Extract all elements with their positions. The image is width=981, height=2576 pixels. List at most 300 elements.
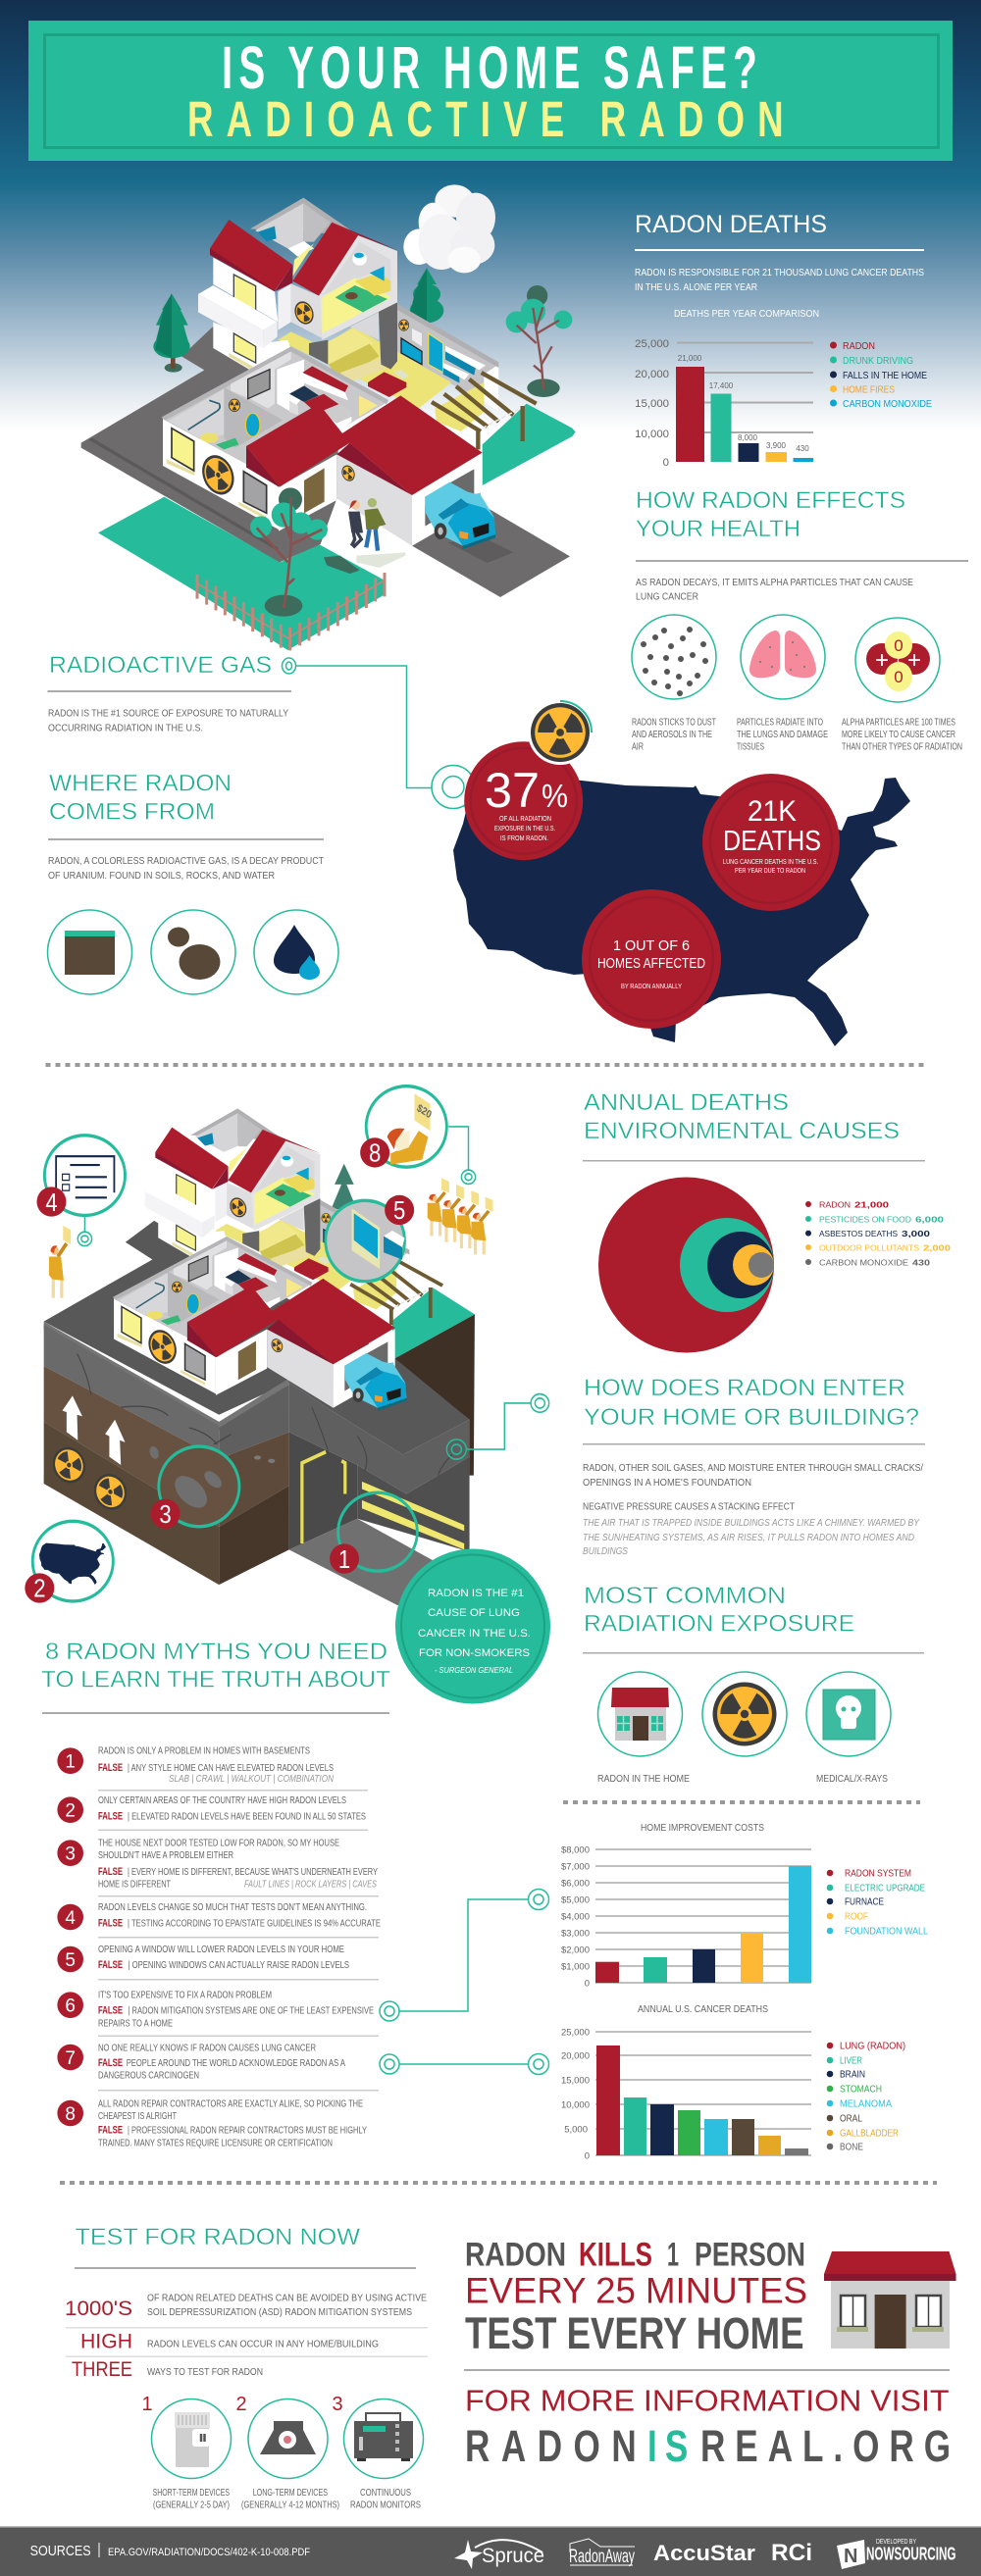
text: radioactive gas body: OCCURRING RADIATION IN THE U.S.	[48, 723, 203, 733]
text: entry explanation: BUILDINGS	[583, 1546, 628, 1557]
myth 6: REPAIRS TO A HOME	[98, 2018, 173, 2029]
quote circle: surgeon general: RADON IS THE #1	[428, 1588, 524, 1599]
trees and cloud	[153, 184, 572, 397]
logo: nowsourcing: N	[844, 2546, 857, 2567]
logo: rci: RCi	[771, 2540, 812, 2566]
heading: RADIOACTIVE GAS	[49, 652, 272, 679]
bar chart: home improvement costs	[561, 1823, 811, 1989]
fact: high: RADON LEVELS CAN OCCUR IN ANY HOME/BUILDING	[147, 2340, 379, 2350]
legend: deaths per year: FALLS IN THE HOME	[843, 371, 927, 381]
myth 2	[57, 1795, 366, 1823]
callout 4: checklist	[36, 1136, 125, 1298]
fence	[197, 573, 385, 650]
legend: 430	[912, 1257, 930, 1267]
myth 7: DANGEROUS CARCINOGEN	[98, 2071, 199, 2082]
bar chart: deaths per year comparison: 10,000	[635, 429, 669, 440]
legend: cancer deaths: GALLBLADDER	[840, 2128, 899, 2140]
title line 2: RADIOACTIVE RADON	[187, 92, 784, 147]
bar chart: deaths per year comparison: 430	[796, 444, 809, 453]
device 3: continuous monitor	[332, 2394, 424, 2511]
heading	[584, 1089, 900, 1144]
callout 8: person with sign: $20	[415, 1102, 434, 1122]
ground and gardens	[81, 327, 576, 650]
bar chart: home improvement costs: $8,000	[561, 1845, 590, 1855]
text: where radon body: OF URANIUM. FOUND IN SOILS, ROCKS, AND WATER	[48, 871, 275, 882]
device 3: continuous monitor: RADON MONITORS	[350, 2500, 421, 2511]
bar chart: deaths per year comparison	[635, 309, 819, 469]
myth 4: 4	[65, 1908, 76, 1929]
icon: alpha particles: +	[907, 647, 921, 674]
connector right	[446, 1394, 549, 1459]
icon: radon in the home	[598, 1672, 683, 1756]
stat: 37 percent: IS FROM RADON.	[500, 835, 548, 842]
device 1: short-term: (GENERALLY 2-5 DAY)	[153, 2500, 230, 2511]
quote circle: surgeon general: CAUSE OF LUNG	[428, 1607, 520, 1619]
radiation discs underground	[48, 1440, 131, 1516]
quote circle: surgeon general: FOR NON-SMOKERS	[419, 1647, 530, 1659]
website url: IS	[647, 2421, 688, 2471]
icon: radon particles	[632, 615, 716, 699]
legend: cancer deaths: LIVER	[840, 2055, 862, 2067]
title line 1: IS YOUR HOME SAFE?	[222, 34, 757, 101]
callout 3: rocks: 3	[159, 1500, 172, 1529]
bar chart: annual us cancer deaths: 20,000	[561, 2051, 590, 2061]
myth 8: | PROFESSIONAL RADON REPAIR CONTRACTORS MUST BE HIGHLY	[128, 2126, 367, 2137]
legend: cancer deaths: BRAIN	[840, 2069, 865, 2081]
icon: alpha particles: 0	[894, 636, 904, 655]
callout 1: basement: 1	[338, 1545, 350, 1574]
myth 1: | ANY STYLE HOME CAN HAVE ELEVATED RADON LEVELS	[128, 1763, 334, 1774]
myth 1: FALSE	[98, 1762, 123, 1774]
heading: YOUR HEALTH	[636, 516, 800, 542]
myth 3: THE HOUSE NEXT DOOR TESTED LOW FOR RADON, SO MY HOUSE	[98, 1839, 339, 1849]
myth 2: | ELEVATED RADON LEVELS HAVE BEEN FOUND IN ALL 50 STATES	[128, 1812, 366, 1823]
myth 7: NO ONE REALLY KNOWS IF RADON CAUSES LUNG CANCER	[98, 2043, 316, 2053]
icon: house	[824, 2251, 955, 2349]
callout: radon kills 1 person: EVERY 25 MINUTES	[465, 2271, 807, 2311]
text: radon deaths intro: IN THE U.S. ALONE PER YEAR	[635, 282, 757, 293]
bar chart: deaths per year comparison: 20,000	[635, 369, 669, 380]
back floors	[397, 304, 498, 412]
text: effects intro: AS RADON DECAYS, IT EMITS ALPHA PARTICLES THAT CAN CAUSE	[636, 578, 913, 588]
heading: HOW RADON EFFECTS	[636, 487, 905, 514]
device 1: short-term: SHORT-TERM DEVICES	[153, 2488, 230, 2499]
stat: 1 out of 6 homes: BY RADON ANNUALLY	[621, 984, 682, 990]
nested circle chart	[598, 1177, 774, 1353]
callouts	[25, 1086, 549, 1603]
device 2: long-term: LONG-TERM DEVICES	[253, 2488, 328, 2499]
bar chart: home improvement costs: HOME IMPROVEMENT COSTS	[641, 1823, 764, 1834]
legend: home improvement costs: RADON SYSTEM	[845, 1869, 911, 1879]
patio	[435, 382, 484, 431]
myth 2: 2	[65, 1800, 76, 1822]
fact: three	[72, 2358, 263, 2381]
bar chart: deaths per year comparison: DEATHS PER YEAR COMPARISON	[674, 309, 819, 320]
stat: 1 out of 6 homes: 1 OUT OF 6	[613, 937, 690, 954]
website url	[465, 2421, 951, 2471]
fact: three: THREE	[72, 2358, 132, 2381]
logo: spruce	[454, 2540, 544, 2569]
legend: 6,000	[915, 1214, 944, 1224]
quote circle: surgeon general: CANCER IN THE U.S.	[418, 1628, 531, 1640]
fact: 1000s	[65, 2294, 427, 2320]
myth 6: IT'S TOO EXPENSIVE TO FIX A RADON PROBLEM	[98, 1991, 272, 2001]
callout: radon kills 1 person: KILLS	[579, 2237, 652, 2274]
text: entry explanation: NEGATIVE PRESSURE CAUSES A STACKING EFFECT	[583, 1502, 795, 1512]
callout 8: person with sign: 8	[369, 1139, 381, 1168]
heading	[584, 1583, 854, 1638]
text: entry explanation: OPENINGS IN A HOME'S FOUNDATION	[583, 1478, 751, 1489]
heading: YOUR HOME OR BUILDING?	[584, 1404, 919, 1431]
icon: radiation symbol	[702, 1672, 787, 1756]
callout 1: basement	[330, 1492, 417, 1574]
stat: 37 percent: 37	[485, 763, 540, 818]
fact: 1000s: SOIL DEPRESSURIZATION (ASD) RADON MITIGATION SYSTEMS	[147, 2307, 412, 2318]
stat: 37 percent: EXPOSURE IN THE U.S.	[494, 826, 555, 833]
myth 1	[57, 1746, 335, 1785]
myth 1: 1	[65, 1751, 76, 1773]
stat: 21k deaths	[702, 774, 840, 911]
text: where radon body: RADON, A COLORLESS RADIOACTIVE GAS, IS A DECAY PRODUCT	[48, 856, 324, 867]
text: radon deaths intro: RADON IS RESPONSIBLE FOR 21 THOUSAND LUNG CANCER DEATHS	[635, 268, 924, 278]
myth 5: 5	[65, 1950, 76, 1971]
legend: 2,000	[923, 1243, 951, 1253]
bar chart: home improvement costs: $3,000	[561, 1928, 590, 1940]
map of the united states with statistics	[453, 700, 910, 1046]
myth 6: 6	[65, 1996, 76, 2016]
myth 3: 3	[65, 1844, 76, 1865]
house	[163, 198, 537, 549]
captions: effects: TISSUES	[737, 742, 764, 753]
title banner	[28, 21, 953, 161]
bar chart: home improvement costs: $2,000	[561, 1945, 590, 1955]
logo: nowsourcing	[837, 2539, 955, 2569]
stat: 37 percent: OF ALL RADIATION	[499, 816, 551, 823]
text: entry explanation: THE AIR THAT IS TRAPPED INSIDE BUILDINGS ACTS LIKE A CHIMNEY. WARMED BY	[583, 1518, 920, 1529]
callout: radon kills 1 person: TEST EVERY HOME	[465, 2308, 804, 2358]
legend: deaths per year	[830, 341, 932, 410]
myth 5: FALSE	[98, 1959, 123, 1971]
heading: 8 radon myths: TO LEARN THE TRUTH ABOUT	[41, 1667, 390, 1692]
text: where radon body	[48, 856, 324, 882]
heading: ENVIRONMENTAL CAUSES	[584, 1118, 900, 1144]
fact: three: WAYS TO TEST FOR RADON	[147, 2367, 263, 2378]
text: radioactive gas body: RADON IS THE #1 SOURCE OF EXPOSURE TO NATURALLY	[48, 709, 288, 720]
myth 7: 7	[65, 2048, 76, 2069]
legend: deaths per year: DRUNK DRIVING	[843, 356, 913, 367]
legend: home improvement costs: ROOF	[845, 1912, 868, 1922]
legend: 3,000	[902, 1229, 930, 1238]
four people with signs	[428, 1179, 492, 1254]
callout: radon kills 1 person: PERSON	[695, 2237, 805, 2274]
call to action: for more information: FOR MORE INFORMATION VISIT	[465, 2384, 950, 2418]
front wings	[279, 454, 336, 531]
bar chart: deaths per year comparison: 3,900	[766, 441, 787, 450]
upper storey	[250, 198, 358, 235]
panel: how radon effects your health	[632, 487, 968, 753]
legend: CARBON MONOXIDE	[819, 1257, 908, 1267]
legend: cancer deaths: MELANOMA	[840, 2098, 892, 2110]
panel: most common radiation exposure	[583, 1583, 924, 1785]
bar chart: annual us cancer deaths: ANNUAL U.S. CANCER DEATHS	[638, 2004, 768, 2015]
legend: home improvement costs: FURNACE	[845, 1896, 884, 1908]
bar chart: home improvement costs: $4,000	[561, 1912, 590, 1922]
myth 4	[57, 1902, 381, 1930]
myth 6: FALSE	[98, 2005, 123, 2017]
quote circle: surgeon general: - SURGEON GENERAL	[435, 1666, 513, 1675]
illustration: house on ground cross-section	[25, 1086, 549, 1605]
callout 5: window and books: 5	[393, 1197, 405, 1226]
callout 8: person with sign	[360, 1086, 476, 1184]
captions	[597, 1774, 888, 1785]
legend: ASBESTOS DEATHS	[819, 1229, 898, 1238]
sources: EPA.GOV/RADIATION/DOCS/402-K-10-008.PDF	[108, 2547, 310, 2558]
device 2: long-term: 2	[235, 2394, 247, 2415]
bar chart: home improvement costs: $5,000	[561, 1894, 590, 1906]
myth 8: TRAINED. MANY STATES REQUIRE LICENSURE OR CERTIFICATION	[98, 2139, 333, 2149]
myth 6	[57, 1991, 374, 2029]
stat: 37 percent: %	[542, 778, 568, 814]
callout 2: map of usa: 2	[33, 1575, 46, 1603]
myth 8: ALL RADON REPAIR CONTRACTORS ARE EXACTLY ALIKE, SO PICKING THE	[98, 2098, 363, 2109]
device 2: long-term	[235, 2394, 339, 2511]
panel: annual deaths environmental causes	[583, 1089, 951, 1353]
myth 3: FALSE	[98, 1866, 123, 1878]
myth 2: ONLY CERTAIN AREAS OF THE COUNTRY HAVE HIGH RADON LEVELS	[98, 1795, 346, 1806]
icon: water drops	[254, 910, 338, 994]
legend: deaths per year: CARBON MONOXIDE	[843, 399, 932, 410]
bar chart: home improvement costs: $1,000	[561, 1961, 590, 1973]
text: radon deaths intro	[635, 268, 924, 293]
sky gradient background	[0, 0, 981, 431]
myth 5: OPENING A WINDOW WILL LOWER RADON LEVELS IN YOUR HOME	[98, 1945, 344, 1955]
website url: REAL.ORG	[700, 2421, 951, 2471]
sources	[30, 2543, 310, 2559]
myth 8: FALSE	[98, 2125, 123, 2137]
icon: alpha particles: 0	[894, 668, 904, 686]
stat: 21k deaths: LUNG CANCER DEATHS IN THE U.S.	[723, 859, 818, 866]
footer	[0, 2526, 981, 2576]
stat: 21k deaths: 21K	[748, 795, 797, 828]
bar chart: home improvement costs: $6,000	[561, 1879, 590, 1889]
small us map in callout 2	[39, 1543, 106, 1585]
bar chart: deaths per year comparison: 0	[663, 457, 669, 469]
stat: 1 out of 6 homes: HOMES AFFECTED	[597, 955, 705, 972]
myth 8: CHEAPEST IS ALRIGHT	[98, 2111, 177, 2122]
myth 8: 8	[65, 2104, 76, 2125]
heading: HOW DOES RADON ENTER	[584, 1375, 905, 1401]
device 3: continuous monitor: 3	[332, 2394, 343, 2415]
device 3: continuous monitor: CONTINUOUS	[360, 2488, 411, 2499]
bar chart: annual us cancer deaths: 15,000	[561, 2075, 590, 2087]
heading: radon deaths: RADON DEATHS	[635, 211, 827, 238]
heading	[49, 771, 232, 826]
captions: MEDICAL/X-RAYS	[816, 1774, 888, 1785]
callout 4: checklist: 4	[45, 1188, 58, 1217]
myth 7: PEOPLE AROUND THE WORLD ACKNOWLEDGE RADON AS A	[127, 2058, 345, 2069]
bar chart: annual us cancer deaths: 5,000	[564, 2124, 588, 2136]
legend: cancer deaths	[827, 2042, 905, 2153]
fact: high	[80, 2331, 379, 2353]
heading: MOST COMMON	[584, 1583, 786, 1609]
bar chart: deaths per year comparison: 8,000	[738, 433, 758, 442]
myth 6: | RADON MITIGATION SYSTEMS ARE ONE OF THE LEAST EXPENSIVE	[128, 2006, 374, 2017]
captions: effects: THE LUNGS AND DAMAGE	[737, 730, 828, 740]
myth 3	[57, 1839, 378, 1891]
legend: cancer deaths: ORAL	[840, 2114, 862, 2124]
captions: effects: PARTICLES RADIATE INTO	[737, 717, 823, 728]
panel: how does radon enter	[583, 1375, 925, 1557]
icon: x-ray skull	[806, 1672, 891, 1756]
stat: 1 out of 6 homes	[582, 889, 721, 1029]
bar chart: home improvement costs: 0	[585, 1979, 590, 1989]
panel: myths list	[57, 1746, 381, 2149]
myth 3: SHOULDN'T HAVE A PROBLEM EITHER	[98, 1850, 233, 1861]
bar chart: annual us cancer deaths: 10,000	[561, 2100, 590, 2110]
legend: home improvement costs	[827, 1869, 928, 1938]
legend: cancer deaths: STOMACH	[840, 2085, 882, 2095]
callout 3: rocks	[151, 1446, 239, 1529]
connector: myth 7 to cancer chart	[380, 2053, 549, 2075]
bar chart: annual us cancer deaths: 0	[585, 2151, 590, 2161]
myth 5	[57, 1945, 349, 1972]
lower white wing and balcony	[213, 322, 291, 371]
legend: cancer deaths: BONE	[840, 2142, 863, 2153]
myth 7: FALSE	[98, 2057, 123, 2069]
myth 3: FAULT LINES | ROCK LAYERS | CAVES	[244, 1880, 377, 1891]
legend: home improvement costs: FOUNDATION WALL	[845, 1926, 928, 1938]
captions: effects: AND AEROSOLS IN THE	[632, 730, 712, 740]
myth 2: FALSE	[98, 1811, 123, 1823]
myth 3: | EVERY HOME IS DIFFERENT, BECAUSE WHAT'S UNDERNEATH EVERY	[128, 1867, 378, 1878]
myth 8	[57, 2098, 367, 2149]
heading: COMES FROM	[49, 799, 215, 826]
us map	[453, 775, 910, 1046]
myth 1: SLAB | CRAWL | WALKOUT | COMBINATION	[169, 1774, 335, 1785]
bar chart: deaths per year comparison: 25,000	[635, 338, 669, 350]
bar chart: deaths per year comparison: 15,000	[635, 398, 669, 410]
heading: ANNUAL DEATHS	[584, 1089, 789, 1116]
logo: spruce: Spruce	[482, 2545, 544, 2567]
text: entry explanation	[583, 1463, 923, 1557]
heading: RADIATION EXPOSURE	[584, 1610, 854, 1638]
upward arrows	[63, 1395, 125, 1465]
bar chart: deaths per year comparison: 21,000	[678, 354, 702, 363]
myth 4: RADON LEVELS CHANGE SO MUCH THAT TESTS DON'T MEAN ANYTHING.	[98, 1902, 367, 1913]
heading: TEST FOR RADON NOW	[75, 2224, 360, 2250]
myth 7	[57, 2043, 345, 2082]
quote circle: surgeon general	[395, 1549, 550, 1704]
captions: RADON IN THE HOME	[597, 1774, 690, 1785]
icon: rocks	[151, 910, 235, 994]
fact: high: HIGH	[80, 2331, 132, 2353]
heading	[584, 1375, 919, 1431]
legend: cancer deaths: LUNG (RADON)	[840, 2042, 905, 2051]
myth 3: HOME IS DIFFERENT	[98, 1880, 171, 1891]
panel: radioactive gas	[47, 652, 475, 808]
connector: myth 6 to home improvement chart	[380, 1889, 549, 2021]
icon: soil	[47, 910, 131, 994]
ground floor rooms	[163, 349, 387, 464]
house in cross-section	[114, 1108, 442, 1411]
bar chart: home improvement costs: $7,000	[561, 1861, 590, 1873]
couple	[348, 498, 386, 551]
pergola	[432, 373, 537, 449]
ground block	[44, 1164, 475, 1605]
stat: 21k deaths: DEATHS	[723, 826, 821, 857]
legend: 21,000	[854, 1200, 889, 1210]
fact: 1000s: 1000'S	[65, 2298, 132, 2320]
logo: radonaway: RadonAway	[569, 2547, 635, 2567]
panel: test for radon now	[65, 2224, 428, 2511]
callout: radon kills 1 person	[465, 2237, 807, 2358]
legend: RADON	[819, 1200, 851, 1210]
connector to map	[283, 658, 475, 808]
panel: radon deaths	[635, 211, 932, 469]
bar chart: annual us cancer deaths	[561, 2004, 811, 2161]
heading	[636, 487, 905, 542]
logo: nowsourcing: DEVELOPED BY	[876, 2539, 916, 2546]
panel: where radon comes from	[47, 771, 338, 994]
device 1: short-term: 1	[141, 2394, 153, 2415]
legend: home improvement costs: ELECTRIC UPGRADE	[845, 1883, 925, 1894]
myth 4: FALSE	[98, 1918, 123, 1930]
icon: lungs	[741, 615, 825, 699]
callout: radon kills 1 person: 1	[667, 2237, 679, 2274]
heading: WHERE RADON	[49, 771, 232, 797]
text: entry explanation: RADON, OTHER SOIL GASES, AND MOISTURE ENTER THROUGH SMALL CRACKS/	[583, 1463, 923, 1474]
front tree, couple and fence	[197, 487, 386, 650]
callout: radon kills 1 person: RADON	[465, 2237, 566, 2274]
legend: deaths per year: HOME FIRES	[843, 384, 895, 396]
bar chart: deaths per year comparison: 17,400	[709, 381, 734, 390]
device 1: short-term	[141, 2394, 232, 2511]
stat: 37 percent	[464, 741, 583, 860]
heading: 8 radon myths	[41, 1639, 390, 1692]
sources: SOURCES	[30, 2543, 91, 2559]
text: effects intro	[636, 578, 913, 602]
legend	[805, 1200, 951, 1267]
bar chart: annual us cancer deaths: 25,000	[561, 2028, 590, 2038]
front-left wall	[163, 419, 279, 530]
captions: effects: AIR	[632, 742, 644, 753]
myth 1: RADON IS ONLY A PROBLEM IN HOMES WITH BASEMENTS	[98, 1746, 310, 1757]
icon: alpha particles	[855, 618, 940, 702]
captions: effects: RADON STICKS TO DUST	[632, 717, 716, 728]
illustration: isometric house scene	[81, 184, 576, 650]
text: effects intro: LUNG CANCER	[636, 592, 698, 602]
logo: accustar: AccuStar	[653, 2541, 755, 2565]
legend: PESTICIDES ON FOOD	[819, 1214, 911, 1224]
heading: 8 radon myths: 8 RADON MYTHS YOU NEED	[45, 1639, 387, 1665]
legend: deaths per year: RADON	[843, 341, 875, 352]
icon: alpha particles: +	[875, 647, 889, 674]
car	[425, 482, 495, 546]
legend: OUTDOOR POLLUTANTS	[819, 1243, 919, 1253]
myth 4: | TESTING ACCORDING TO EPA/STATE GUIDELINES IS 94% ACCURATE	[128, 1919, 381, 1930]
icon: radiation symbol	[528, 700, 593, 765]
callout 5: window and books	[326, 1195, 414, 1282]
device 2: long-term: (GENERALLY 4-12 MONTHS)	[241, 2500, 339, 2511]
captions: effects	[632, 717, 962, 753]
text: radioactive gas body	[48, 709, 288, 733]
myth 5: | OPENING WINDOWS CAN ACTUALLY RAISE RADON LEVELS	[128, 1960, 349, 1971]
stat: 21k deaths: PER YEAR DUE TO RADON	[735, 868, 805, 875]
logo: radonaway	[569, 2539, 635, 2567]
website url: RADON	[465, 2421, 637, 2471]
fact: 1000s: OF RADON RELATED DEATHS CAN BE AVOIDED BY USING ACTIVE	[147, 2294, 427, 2304]
text: entry explanation: THE SUN/HEATING SYSTEMS, AS AIR RISES, IT PULLS RADON INTO HOMES AND	[583, 1533, 914, 1543]
